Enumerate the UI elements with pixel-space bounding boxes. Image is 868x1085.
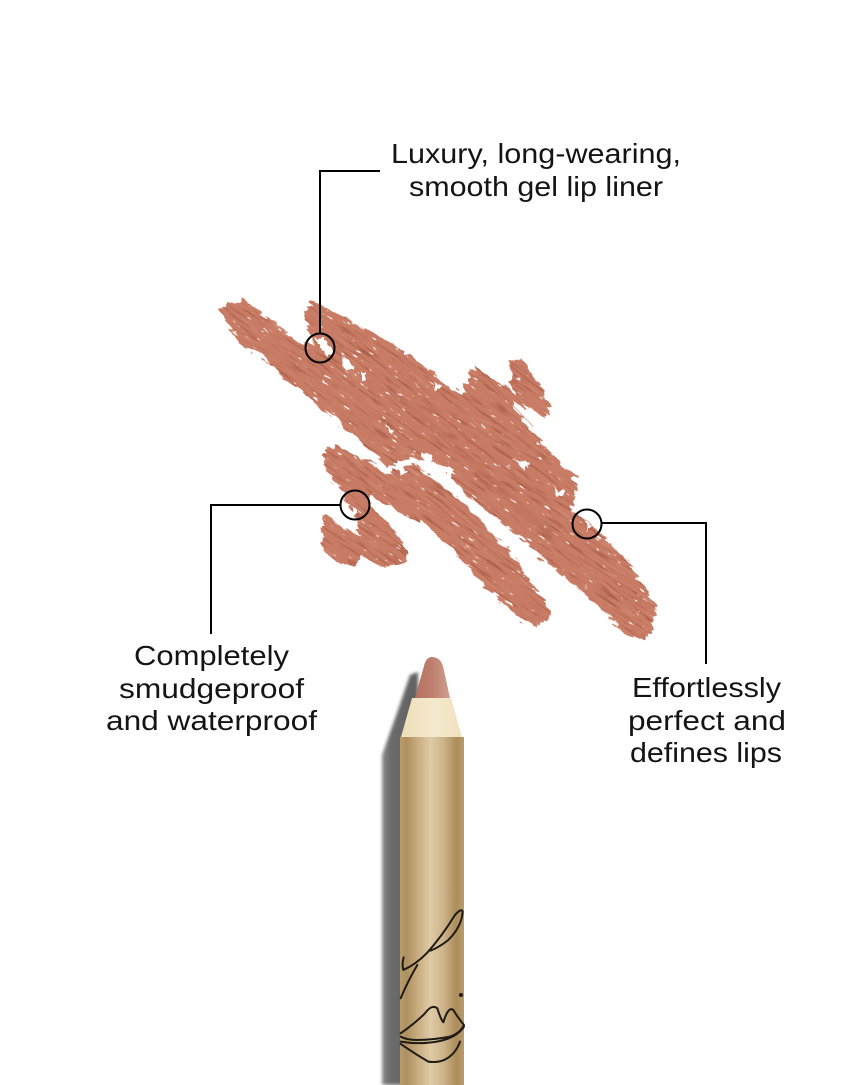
pencil lead tip bbox=[415, 657, 450, 698]
callout text: Luxury, long-wearing, bbox=[391, 138, 681, 169]
pencil wood bbox=[401, 698, 462, 737]
swatch streaks bbox=[340, 330, 637, 593]
callout text bbox=[106, 640, 317, 736]
leader line bbox=[602, 523, 706, 664]
pencil logo bbox=[401, 910, 464, 1062]
leader line bbox=[320, 171, 380, 334]
leader line bbox=[211, 505, 340, 634]
callout: luxury gel bbox=[306, 138, 681, 362]
lip liner pencil bbox=[400, 657, 464, 1085]
callout text: smudgeproof bbox=[119, 673, 304, 704]
marker circle bbox=[340, 490, 370, 520]
marker circle bbox=[306, 334, 334, 362]
callout text bbox=[391, 138, 681, 202]
callout text bbox=[628, 672, 786, 768]
lip liner swatch bbox=[58, 93, 818, 847]
callout text: Effortlessly bbox=[632, 672, 781, 703]
callout: effortlessly perfect bbox=[572, 510, 786, 768]
marker circle bbox=[572, 510, 602, 538]
pencil shadow bbox=[382, 672, 420, 1085]
callout text: smooth gel lip liner bbox=[409, 171, 663, 202]
swatch gaps bbox=[315, 337, 593, 529]
callout text: and waterproof bbox=[106, 705, 317, 736]
callout: smudgeproof bbox=[106, 490, 370, 736]
callout text: perfect and bbox=[628, 705, 786, 736]
pencil gold barrel bbox=[400, 737, 464, 1085]
callout text: defines lips bbox=[630, 737, 782, 768]
callout text: Completely bbox=[134, 640, 289, 671]
